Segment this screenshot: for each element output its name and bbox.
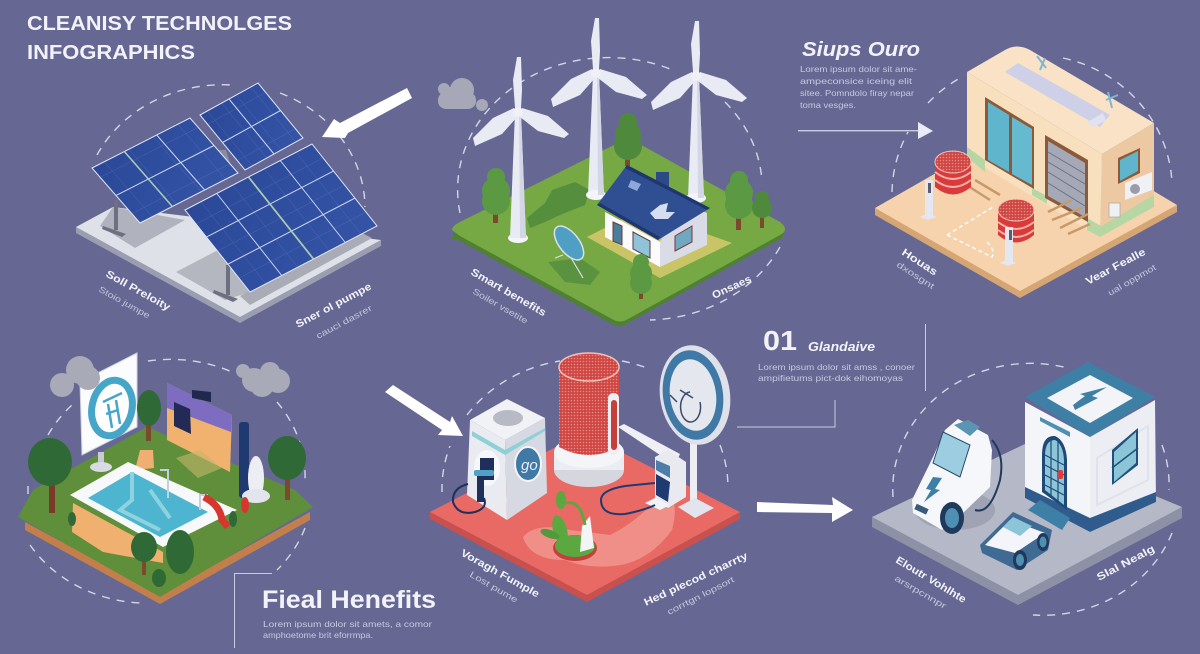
ground xyxy=(430,512,740,602)
label: cauci dasrer: cauci dasrer xyxy=(314,303,374,341)
cable xyxy=(601,483,655,514)
label: dxosgnt: dxosgnt xyxy=(895,259,937,292)
label: soll preloity: Soll Preloity xyxy=(104,268,172,314)
label: sner ol pumpe: Sner ol pumpe xyxy=(294,281,374,331)
panel: wind farm xyxy=(452,18,785,326)
charger posts xyxy=(920,180,1016,266)
tank xyxy=(554,353,624,487)
text: siups body: ampeconsice iceing elit xyxy=(800,76,913,86)
heading: 01 glandaive: 01 xyxy=(763,325,797,356)
dish xyxy=(549,221,589,278)
plant xyxy=(539,491,597,561)
bushes xyxy=(527,182,590,228)
pump box: go xyxy=(521,457,538,474)
panel: pool xyxy=(18,353,313,604)
gauge sign xyxy=(653,341,737,518)
text: benefits body: Lorem ipsum dolor sit amets, a comor xyxy=(263,619,432,629)
arrow: to ev xyxy=(757,497,853,522)
front bushes xyxy=(68,511,237,587)
pipe xyxy=(618,424,680,465)
pump box xyxy=(453,399,547,520)
text: glandaive body: ampifietums pict-dok eihomoyas xyxy=(758,373,903,383)
arrow: to house xyxy=(798,122,933,139)
solar panel: large xyxy=(185,144,377,292)
text: siups body: Lorem ipsum dolor sit ame- xyxy=(800,64,917,74)
ground marks xyxy=(947,180,1090,257)
clouds xyxy=(50,356,290,397)
panel: electric vehicle xyxy=(872,362,1182,615)
label: slal nealg: Slal Nealg xyxy=(1095,543,1157,584)
green ground xyxy=(452,147,784,326)
label: smart benefits: Smart benefits xyxy=(468,266,548,319)
building xyxy=(1025,362,1156,532)
label: hed plecod charrty: Hed plecod charrty xyxy=(642,550,750,609)
text: siups body xyxy=(800,64,917,110)
turbine 3 xyxy=(651,21,747,203)
blue car xyxy=(980,512,1052,570)
bracket: benefits xyxy=(234,574,272,648)
text: siups body: toma vesges. xyxy=(800,100,856,110)
text: benefits body: amphoetome brit eforrmpa. xyxy=(263,630,373,640)
label: soiler vsetite: Soiler vsetite xyxy=(471,286,530,326)
house xyxy=(597,165,710,267)
heading: 01 glandaive: Glandaive xyxy=(808,339,875,354)
heading: siups ouro: Siups Ouro xyxy=(802,39,920,61)
cloud: near solar xyxy=(438,78,488,111)
turbine 1 xyxy=(473,57,569,243)
label: ual oppmot: ual oppmot xyxy=(1106,262,1158,298)
arrow: to pump xyxy=(385,385,463,436)
label: vear fealle: Vear Fealle xyxy=(1084,246,1148,288)
charger box xyxy=(645,450,686,510)
label: eloutr vohlhte: Eloutr Vohlhte xyxy=(893,554,968,606)
label: arsrpcnnpr: arsrpcnnpr xyxy=(893,573,948,611)
column xyxy=(239,422,249,498)
walls xyxy=(967,46,1154,237)
label: lost pume: Lost pume xyxy=(468,569,520,605)
panel posts xyxy=(102,150,238,302)
text: siups body: sitee. Pomndolo firay nepar xyxy=(800,88,914,98)
title: CLEANISY TECHNOLGES xyxy=(27,12,292,35)
steps xyxy=(1028,500,1070,530)
bracket: glandaive xyxy=(737,324,926,427)
panel: pump xyxy=(430,341,740,602)
pool basin xyxy=(70,450,237,563)
text: glandaive body: Lorem ipsum dolor sit amss , conoer xyxy=(758,362,915,372)
title: INFOGRAPHICS xyxy=(27,41,195,64)
ground xyxy=(25,512,310,604)
solar platform xyxy=(76,207,381,323)
heading: 01 glandaive xyxy=(763,325,875,356)
sign xyxy=(80,353,137,472)
arrow: to solar xyxy=(322,88,412,138)
text: benefits body xyxy=(263,619,432,640)
ground xyxy=(872,507,1182,605)
billboard xyxy=(167,383,232,478)
solar panel: left xyxy=(92,118,238,223)
front tree xyxy=(630,254,652,299)
title xyxy=(27,12,292,64)
ground xyxy=(875,205,1177,298)
label: onsaes: Onsaes xyxy=(710,273,753,302)
label: stoio jumpe: Stoio jumpe xyxy=(97,284,152,321)
ac unit xyxy=(1109,172,1152,217)
heading: fieal henefits: Fieal Henefits xyxy=(262,586,436,614)
panel: solar array xyxy=(76,83,381,323)
trees xyxy=(482,113,772,230)
solar panel: back xyxy=(200,83,303,170)
red slide xyxy=(204,497,228,527)
label: corrtgn lopsort: corrtgn lopsort xyxy=(665,574,737,617)
house yard xyxy=(587,210,732,278)
red tanks xyxy=(935,151,1034,242)
white car xyxy=(912,419,1001,534)
roof tube xyxy=(1005,56,1118,127)
label: voragh fumple: Voragh Fumple xyxy=(459,547,541,600)
trees xyxy=(28,390,306,513)
filter and ring xyxy=(241,456,270,513)
turbine 2 xyxy=(551,18,647,200)
panel: house with tanks xyxy=(875,46,1177,298)
text: glandaive body xyxy=(758,362,915,383)
label: houas: Houas xyxy=(899,246,940,278)
